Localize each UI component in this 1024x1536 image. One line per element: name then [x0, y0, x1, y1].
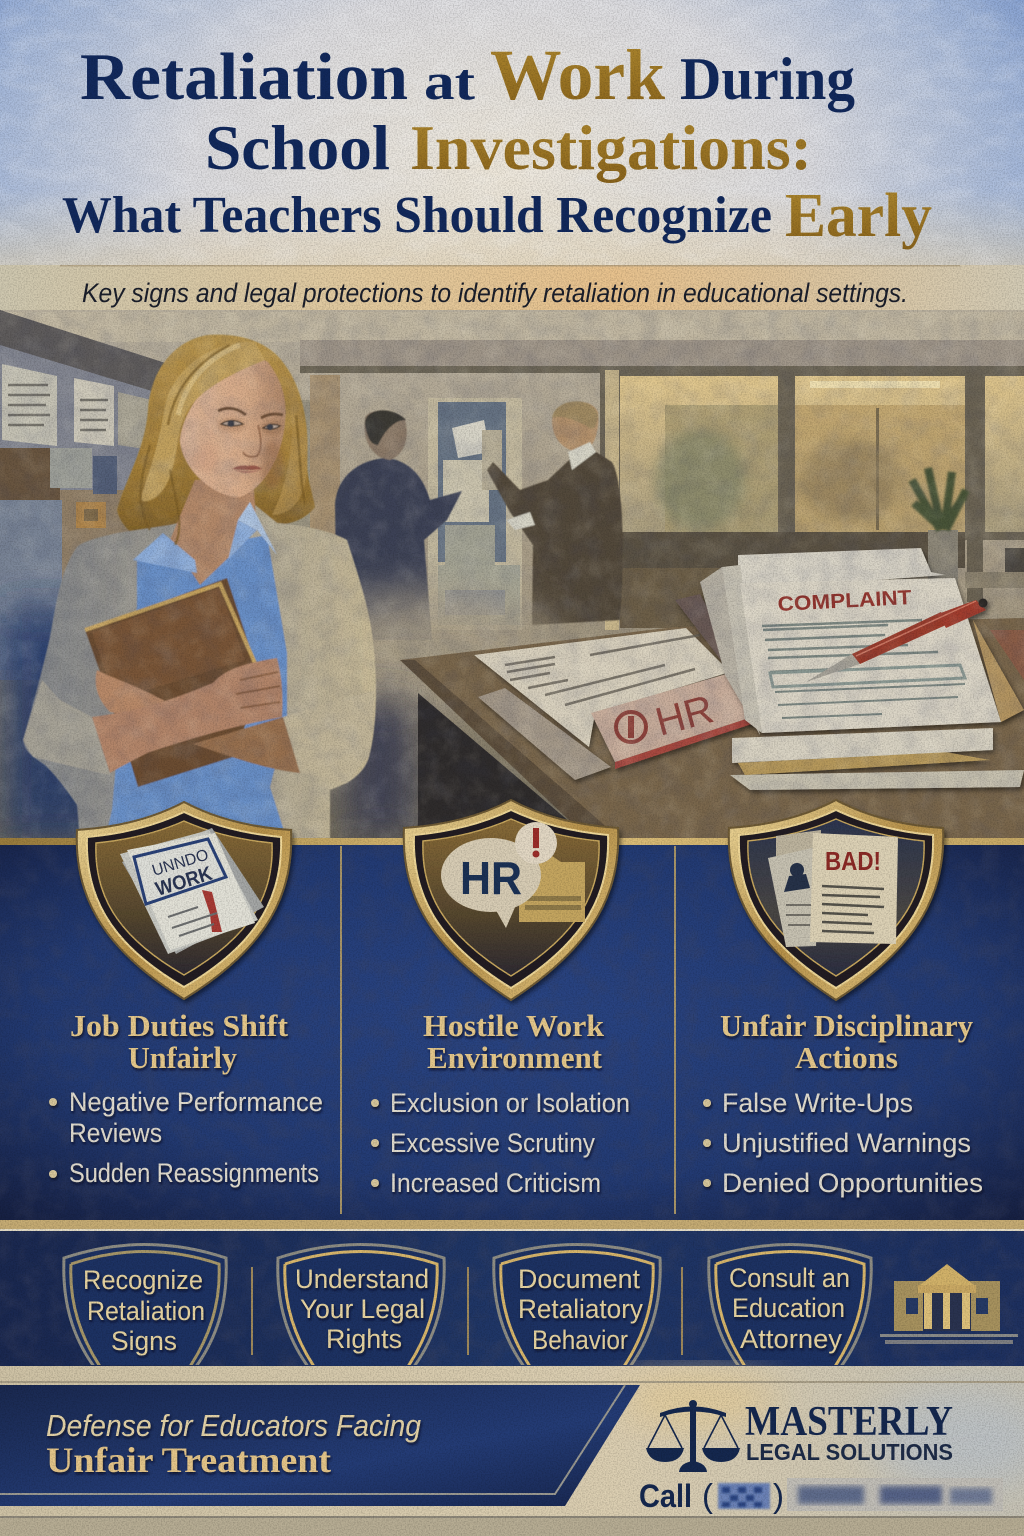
icon: courthouse	[880, 1264, 1018, 1344]
title: Early	[785, 182, 932, 250]
bullet list	[371, 1088, 630, 1198]
book	[85, 578, 255, 787]
badge: understand rights: Rights	[326, 1324, 402, 1354]
man in brown suit	[487, 401, 623, 625]
badge: consult attorney: Attorney	[740, 1324, 842, 1354]
complaint sheet	[740, 578, 1001, 733]
title: Investigations:	[410, 112, 812, 183]
bullet list	[703, 1088, 983, 1198]
action band	[0, 1231, 1024, 1368]
icon: HR bubble and folder	[441, 822, 585, 928]
subtitle band	[0, 265, 1024, 312]
shield: write-up documents	[729, 800, 943, 1000]
icon: scales of justice	[646, 1400, 740, 1472]
face	[180, 360, 286, 497]
right sleeve	[283, 690, 375, 783]
scene texture overlay	[0, 312, 1024, 842]
HR tag: HR	[651, 687, 718, 745]
bulletin papers on wall	[2, 364, 152, 528]
fog and lower-left tone	[0, 590, 560, 845]
bullet list	[49, 1087, 323, 1188]
phone number, redacted: )	[773, 1477, 784, 1514]
heading	[70, 1008, 289, 1075]
left wall	[0, 310, 340, 680]
windows	[600, 370, 1024, 630]
heading: Actions	[795, 1040, 898, 1075]
tagline text: Defense for Educators Facing	[46, 1408, 421, 1443]
complaint sheet: COMPLAINT	[777, 586, 913, 616]
phone number, redacted	[639, 1477, 1003, 1514]
cardigan	[23, 505, 376, 840]
logo: LEGAL SOLUTIONS	[746, 1439, 953, 1465]
front forearm and hand	[92, 658, 282, 773]
rear wall board	[428, 398, 522, 630]
badge: recognize	[64, 1244, 226, 1368]
badge: document behavior	[494, 1244, 660, 1368]
title	[62, 35, 932, 250]
bullet list: Reviews	[69, 1118, 162, 1148]
bullet list: Increased Criticism	[390, 1168, 601, 1198]
bullet list: False Write-Ups	[722, 1088, 913, 1118]
title: Retaliation	[80, 40, 408, 114]
icon: HR bubble and folder: HR	[460, 852, 522, 904]
tagline text	[46, 1408, 421, 1480]
badge: understand rights: Understand	[295, 1264, 429, 1294]
shield: reassigned work	[77, 802, 291, 999]
hair front strands	[140, 342, 307, 545]
title: School	[205, 112, 390, 183]
heading	[720, 1008, 973, 1075]
column 3: disciplinary actions	[703, 1008, 983, 1198]
badge: consult attorney: Consult an	[729, 1263, 850, 1293]
bullet list: Denied Opportunities	[722, 1168, 983, 1198]
badge: recognize: Retaliation	[87, 1296, 205, 1326]
man in navy suit	[335, 410, 462, 640]
woman with book	[23, 335, 376, 840]
tagline text: Unfair Treatment	[46, 1440, 331, 1480]
hair back	[117, 335, 315, 548]
bullet list: Sudden Reassignments	[69, 1158, 319, 1188]
badge: consult attorney: Education	[732, 1293, 845, 1323]
papers: complaint stack	[675, 548, 1024, 790]
ceiling beam	[0, 312, 1024, 373]
badge: understand rights: Your Legal	[300, 1294, 425, 1324]
icon: documents marked BAD: BAD!	[825, 846, 881, 876]
badge: understand rights	[278, 1244, 444, 1368]
bullet list: Exclusion or Isolation	[390, 1088, 630, 1118]
tagline banner	[0, 1385, 640, 1506]
papers: HR file	[474, 628, 758, 780]
left sleeve	[23, 680, 110, 775]
column 1: job duties	[49, 1008, 323, 1188]
plant	[912, 468, 966, 590]
badge: recognize: Signs	[111, 1326, 177, 1356]
icon: stack of papers: UNNDO	[150, 847, 211, 880]
neck	[170, 480, 257, 585]
two men talking	[335, 401, 623, 640]
main panel: blue background	[0, 838, 1024, 1231]
phone number, redacted: Call	[639, 1478, 692, 1514]
heading: Unfairly	[128, 1040, 237, 1075]
title: What Teachers Should Recognize	[62, 187, 772, 244]
scene: office background	[0, 310, 1024, 845]
shirt	[105, 480, 287, 840]
heading: Environment	[427, 1040, 603, 1075]
badge: consult attorney	[709, 1244, 871, 1368]
red pen	[806, 598, 988, 682]
badge: document behavior: Behavior	[532, 1325, 628, 1355]
desk	[400, 618, 1024, 840]
badge: document behavior: Document	[518, 1264, 640, 1294]
bottom cream section	[0, 1366, 1024, 1536]
bullet list: Negative Performance	[69, 1087, 323, 1117]
badge: recognize: Recognize	[83, 1265, 203, 1295]
heading: Hostile Work	[423, 1008, 605, 1043]
bullet list: Excessive Scrutiny	[390, 1128, 595, 1158]
icon: stack of papers	[120, 828, 264, 954]
logo: MASTERLY	[745, 1399, 953, 1445]
shield: HR complaint	[404, 800, 618, 1000]
HR tag	[591, 673, 758, 769]
column 2: hostile environment	[371, 1008, 630, 1198]
bullet list: Unjustified Warnings	[722, 1128, 971, 1158]
phone number, redacted: (	[702, 1477, 713, 1514]
forearm and hand	[96, 670, 300, 773]
heading	[423, 1008, 605, 1075]
shelf	[965, 548, 1024, 588]
heading: Unfair Disciplinary	[720, 1008, 973, 1043]
logo	[646, 1399, 953, 1472]
icon: documents marked BAD	[768, 830, 898, 947]
badge: document behavior: Retaliatory	[518, 1294, 643, 1324]
heading: Job Duties Shift	[70, 1008, 289, 1043]
icon: stack of papers: WORK	[153, 863, 215, 901]
title: Work	[490, 35, 665, 115]
title: During	[680, 46, 855, 112]
subtitle band: Key signs and legal protections to identify retaliation in educational settings.	[82, 278, 908, 308]
title: at	[424, 54, 476, 111]
page background sky	[0, 0, 1024, 312]
